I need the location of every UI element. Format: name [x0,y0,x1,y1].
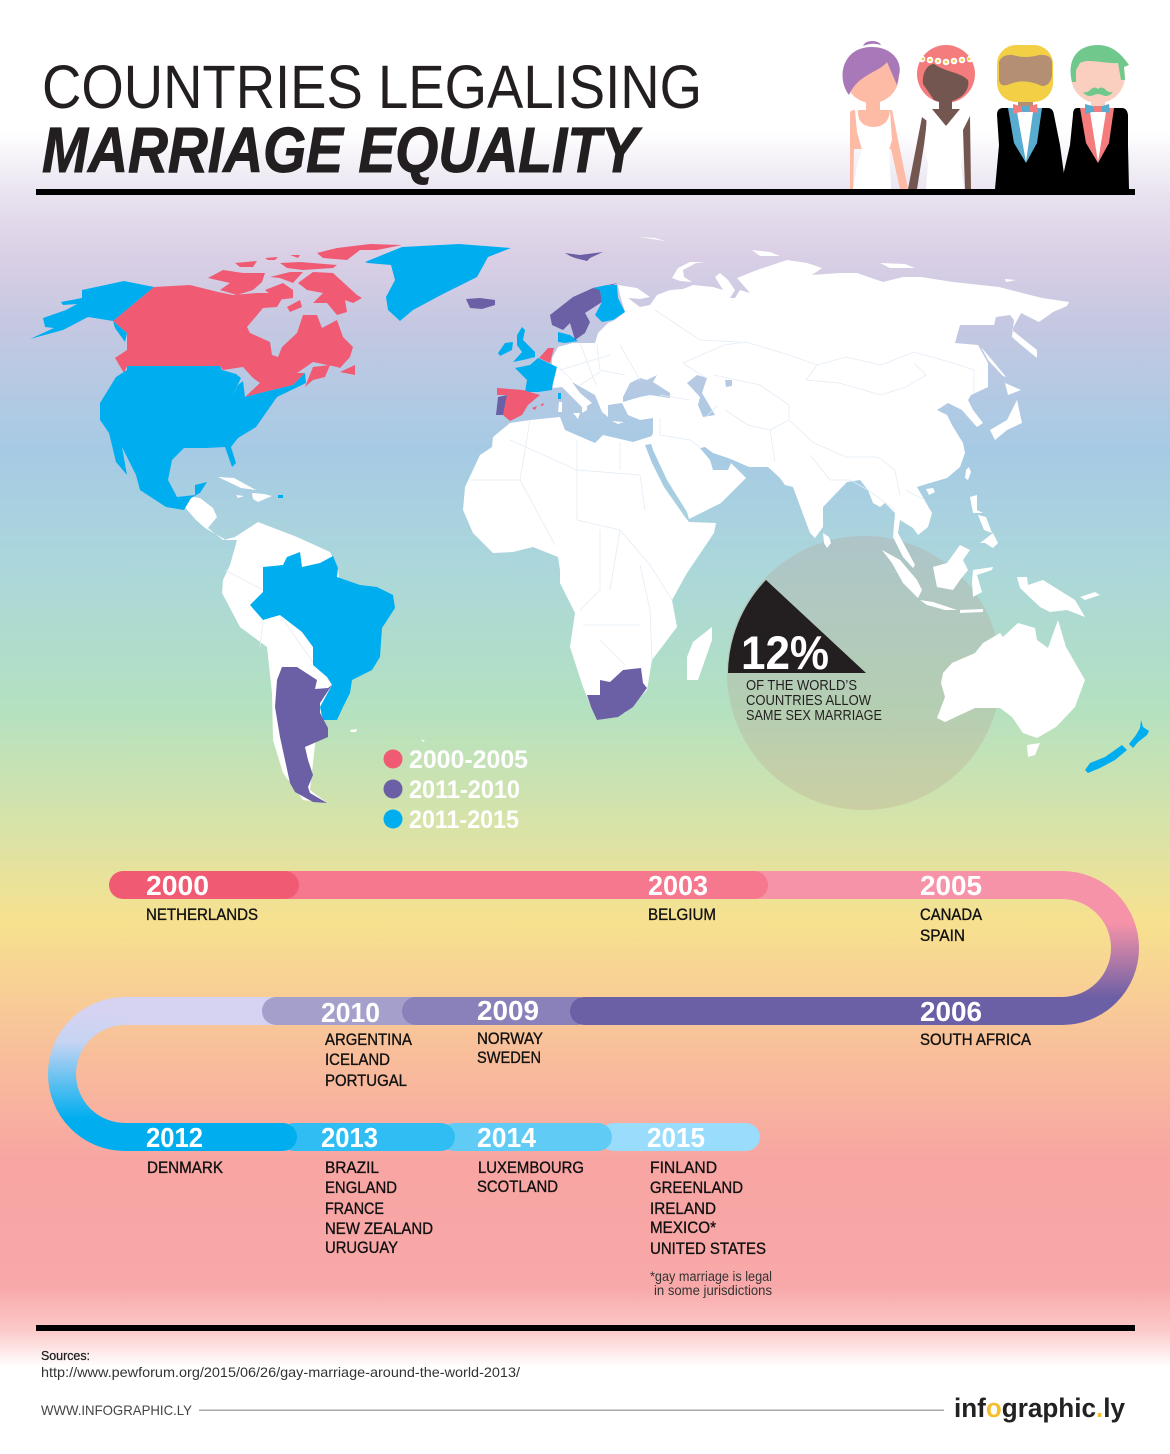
timeline: 2005: SPAIN [920,926,965,945]
footnote: *gay marriage is legal [650,1269,772,1284]
timeline: 2006 [920,996,1032,1049]
timeline: 2013: ENGLAND [325,1178,397,1197]
bride with purple hair [843,41,908,189]
timeline: 2014: LUXEMBOURG [478,1158,584,1177]
map: Western Europe [466,252,625,421]
timeline: 2000 [146,870,258,924]
timeline: 2013: FRANCE [325,1199,384,1218]
timeline: 2014: SCOTLAND [477,1177,558,1196]
timeline: 2013: 2013 [321,1122,378,1153]
map: Brazil and Uruguay (2013) [250,552,395,720]
callout text: 12% of countries [741,626,882,724]
map: Argentina (2010) [275,667,332,803]
map: United States, Mexico, Alaska, Greenland (2015) [30,244,511,510]
legend: 2000-2005 [409,746,528,774]
timeline: 2003: 2003 [648,870,708,901]
title [42,53,702,186]
timeline: 2005: CANADA [920,905,983,924]
timeline: 2015: MEXICO* [650,1218,716,1237]
timeline: 2015: GREENLAND [650,1178,743,1197]
timeline: 2012 [146,1122,224,1177]
callout circle: 12% pie [727,536,1001,810]
legend: 2011-2015 [409,806,519,834]
bottom rule [36,1325,1135,1331]
timeline: 2009: SWEDEN [477,1048,541,1067]
timeline: 2006: 2006 [920,996,982,1027]
timeline: 2009 [477,995,543,1067]
map: Africa [463,417,716,720]
footnote [650,1269,772,1298]
map: islands [218,237,1100,757]
timeline: 2013 [321,1122,433,1257]
timeline: 2015: IRELAND [650,1199,716,1218]
title rule [36,189,1135,195]
timeline: 2012: DENMARK [147,1158,224,1177]
timeline: 2015: 2015 [647,1122,705,1153]
callout text: 12% of countries: OF THE WORLD’S [746,677,857,694]
map: Eurasia [552,260,1069,568]
timeline ribbon [62,871,1125,1151]
timeline: 2010: 2010 [321,997,380,1028]
timeline: 2015 [647,1122,766,1258]
timeline: 2010: PORTUGAL [325,1071,407,1090]
timeline: 2009: NORWAY [477,1029,543,1048]
timeline: 2015: FINLAND [650,1158,717,1177]
timeline: 2005: 2005 [920,870,982,901]
sources [41,1348,520,1380]
timeline: 2010: ICELAND [325,1050,390,1069]
sources: Sources: [41,1348,90,1363]
timeline: 2013: BRAZIL [325,1158,379,1177]
timeline: 2013: URUGUAY [325,1238,398,1257]
timeline: 2009: 2009 [477,995,539,1026]
map: South America and Central America [183,497,340,803]
timeline: 2014 [477,1122,584,1196]
timeline: 2000: NETHERLANDS [146,905,258,924]
callout text: 12% of countries: COUNTRIES ALLOW [746,692,872,709]
map: South Africa (2006) [587,668,647,720]
map: New Zealand [1085,720,1149,773]
logo: infographic.ly [954,1393,1125,1423]
timeline: 2014: 2014 [477,1122,536,1153]
timeline: 2010: ARGENTINA [325,1030,413,1049]
legend: 2011-2010 [409,776,520,804]
timeline: 2012: 2012 [146,1122,203,1153]
timeline: 2010 [321,997,413,1090]
timeline: 2005 [920,870,983,945]
groom with yellow hair [995,45,1066,189]
groom with green hair [1060,45,1129,189]
map: Canada (2005) [113,244,402,397]
title: COUNTRIES LEGALISING [42,53,702,121]
title: MARRIAGE EQUALITY [42,114,643,186]
footnote: in some jurisdictions [654,1283,772,1298]
timeline: 2013: NEW ZEALAND [325,1219,433,1238]
world map [30,237,1149,803]
timeline: 2000: 2000 [146,870,209,901]
callout text: 12% of countries: SAME SEX MARRIAGE [746,707,882,724]
callout text: 12% of countries: 12% [741,626,829,679]
legend [384,746,528,834]
timeline: 2015: UNITED STATES [650,1239,766,1258]
sources: http://www.pewforum.org/2015/06/26/gay-marriage-around-the-world-2013/ [41,1364,520,1380]
bride with flower crown [908,45,975,189]
timeline: 2003: BELGIUM [648,905,716,924]
timeline: 2006: SOUTH AFRICA [920,1030,1032,1049]
timeline: 2003 [648,870,716,924]
map: borders on white land [225,310,974,665]
illustration: two brides and two grooms [843,41,1129,189]
footer website line: WWW.INFOGRAPHIC.LY [41,1402,193,1418]
